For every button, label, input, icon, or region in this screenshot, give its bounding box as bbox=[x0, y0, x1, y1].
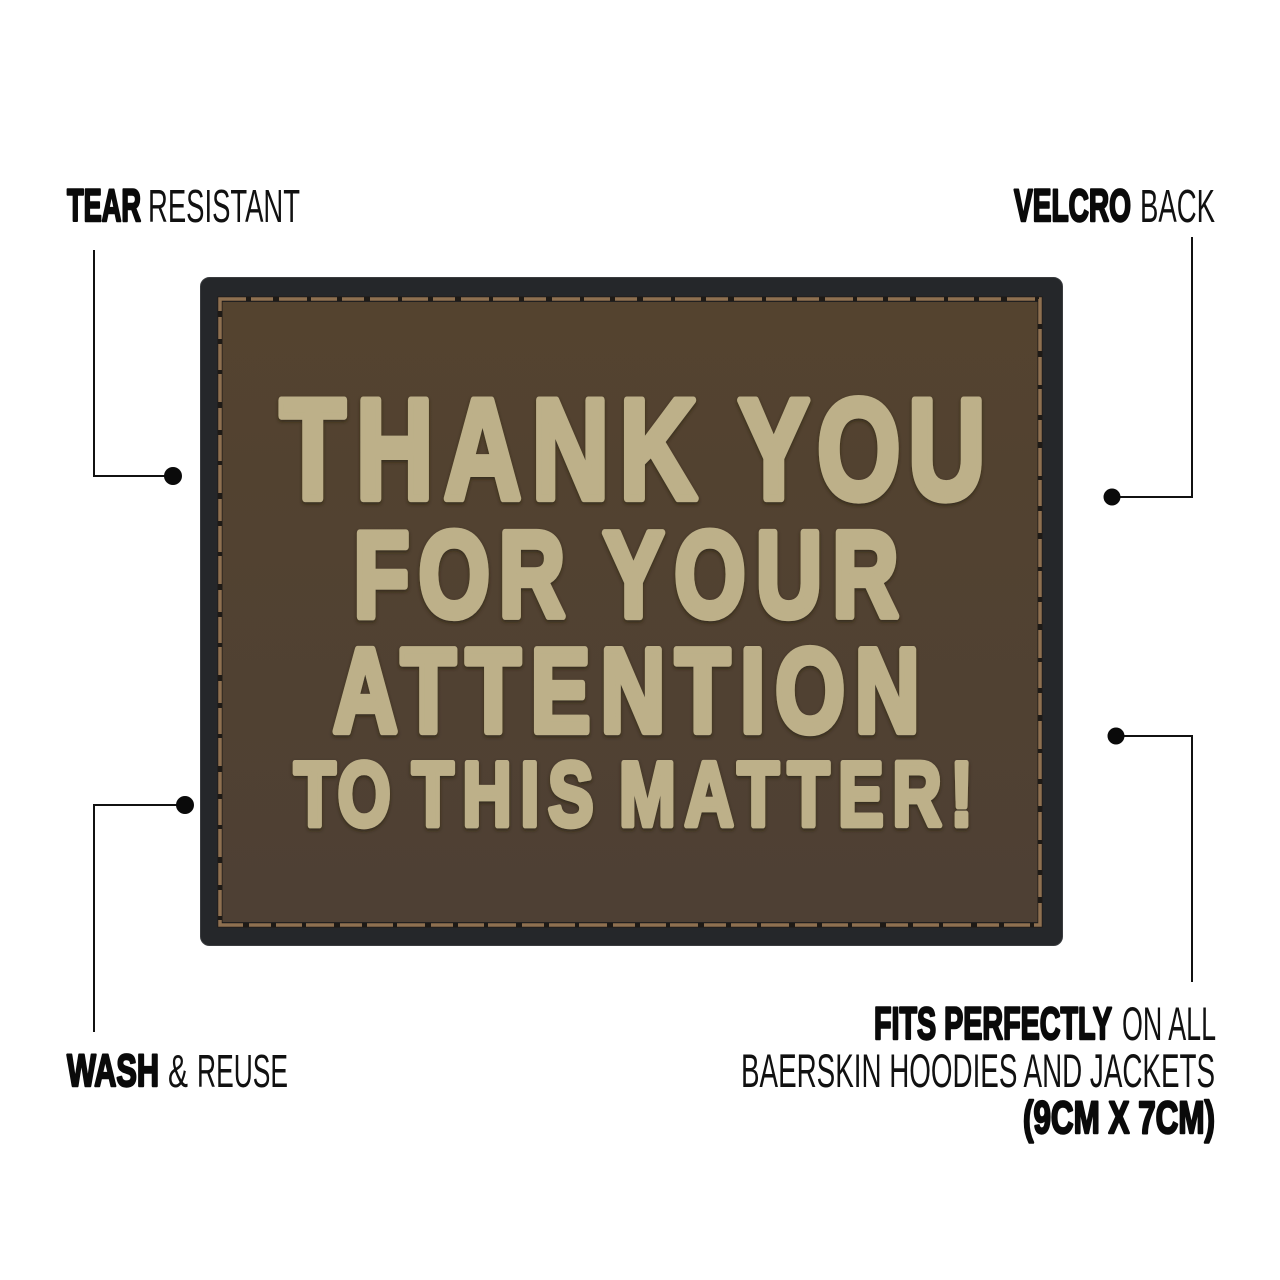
line: for your: FOR bbox=[354, 506, 565, 643]
label: velcro back: VELCRO bbox=[1014, 180, 1131, 231]
callout line: tear resistant bbox=[94, 250, 182, 485]
line: for your bbox=[354, 506, 898, 643]
line: to this matter: TO bbox=[294, 744, 391, 846]
label: fits perfectly bbox=[741, 997, 1216, 1143]
line: thank you: THANK bbox=[280, 370, 697, 529]
label: fits perfectly: FITS PERFECTLY bbox=[874, 998, 1112, 1049]
patch bbox=[200, 278, 1062, 946]
patch slogan bbox=[280, 370, 986, 846]
label: tear resistant bbox=[67, 180, 300, 232]
patch border bbox=[200, 278, 1062, 946]
callout line: velcro back bbox=[1104, 237, 1192, 506]
line: for your: YOUR bbox=[603, 506, 898, 643]
line: to this matter: THIS bbox=[412, 744, 594, 846]
label: tear resistant: RESISTANT bbox=[148, 180, 300, 232]
callout line: fits perfectly bbox=[1108, 728, 1192, 982]
patch centre bbox=[222, 302, 1038, 922]
label: wash and reuse: REUSE bbox=[197, 1045, 288, 1097]
label: wash and reuse: WASH bbox=[67, 1045, 159, 1096]
label: tear resistant: TEAR bbox=[67, 180, 141, 231]
label: wash and reuse bbox=[67, 1045, 288, 1097]
line: thank you bbox=[280, 370, 986, 529]
label: wash and reuse: & bbox=[168, 1045, 188, 1097]
label: velcro back: BACK bbox=[1140, 180, 1215, 232]
callout line: wash and reuse bbox=[94, 796, 194, 1032]
line: to this matter bbox=[294, 744, 973, 846]
line: to this matter: MATTER! bbox=[619, 744, 973, 846]
line: thank you: YOU bbox=[738, 370, 986, 529]
stitching bbox=[220, 299, 1040, 925]
line: attention: ATTENTION bbox=[333, 625, 920, 758]
